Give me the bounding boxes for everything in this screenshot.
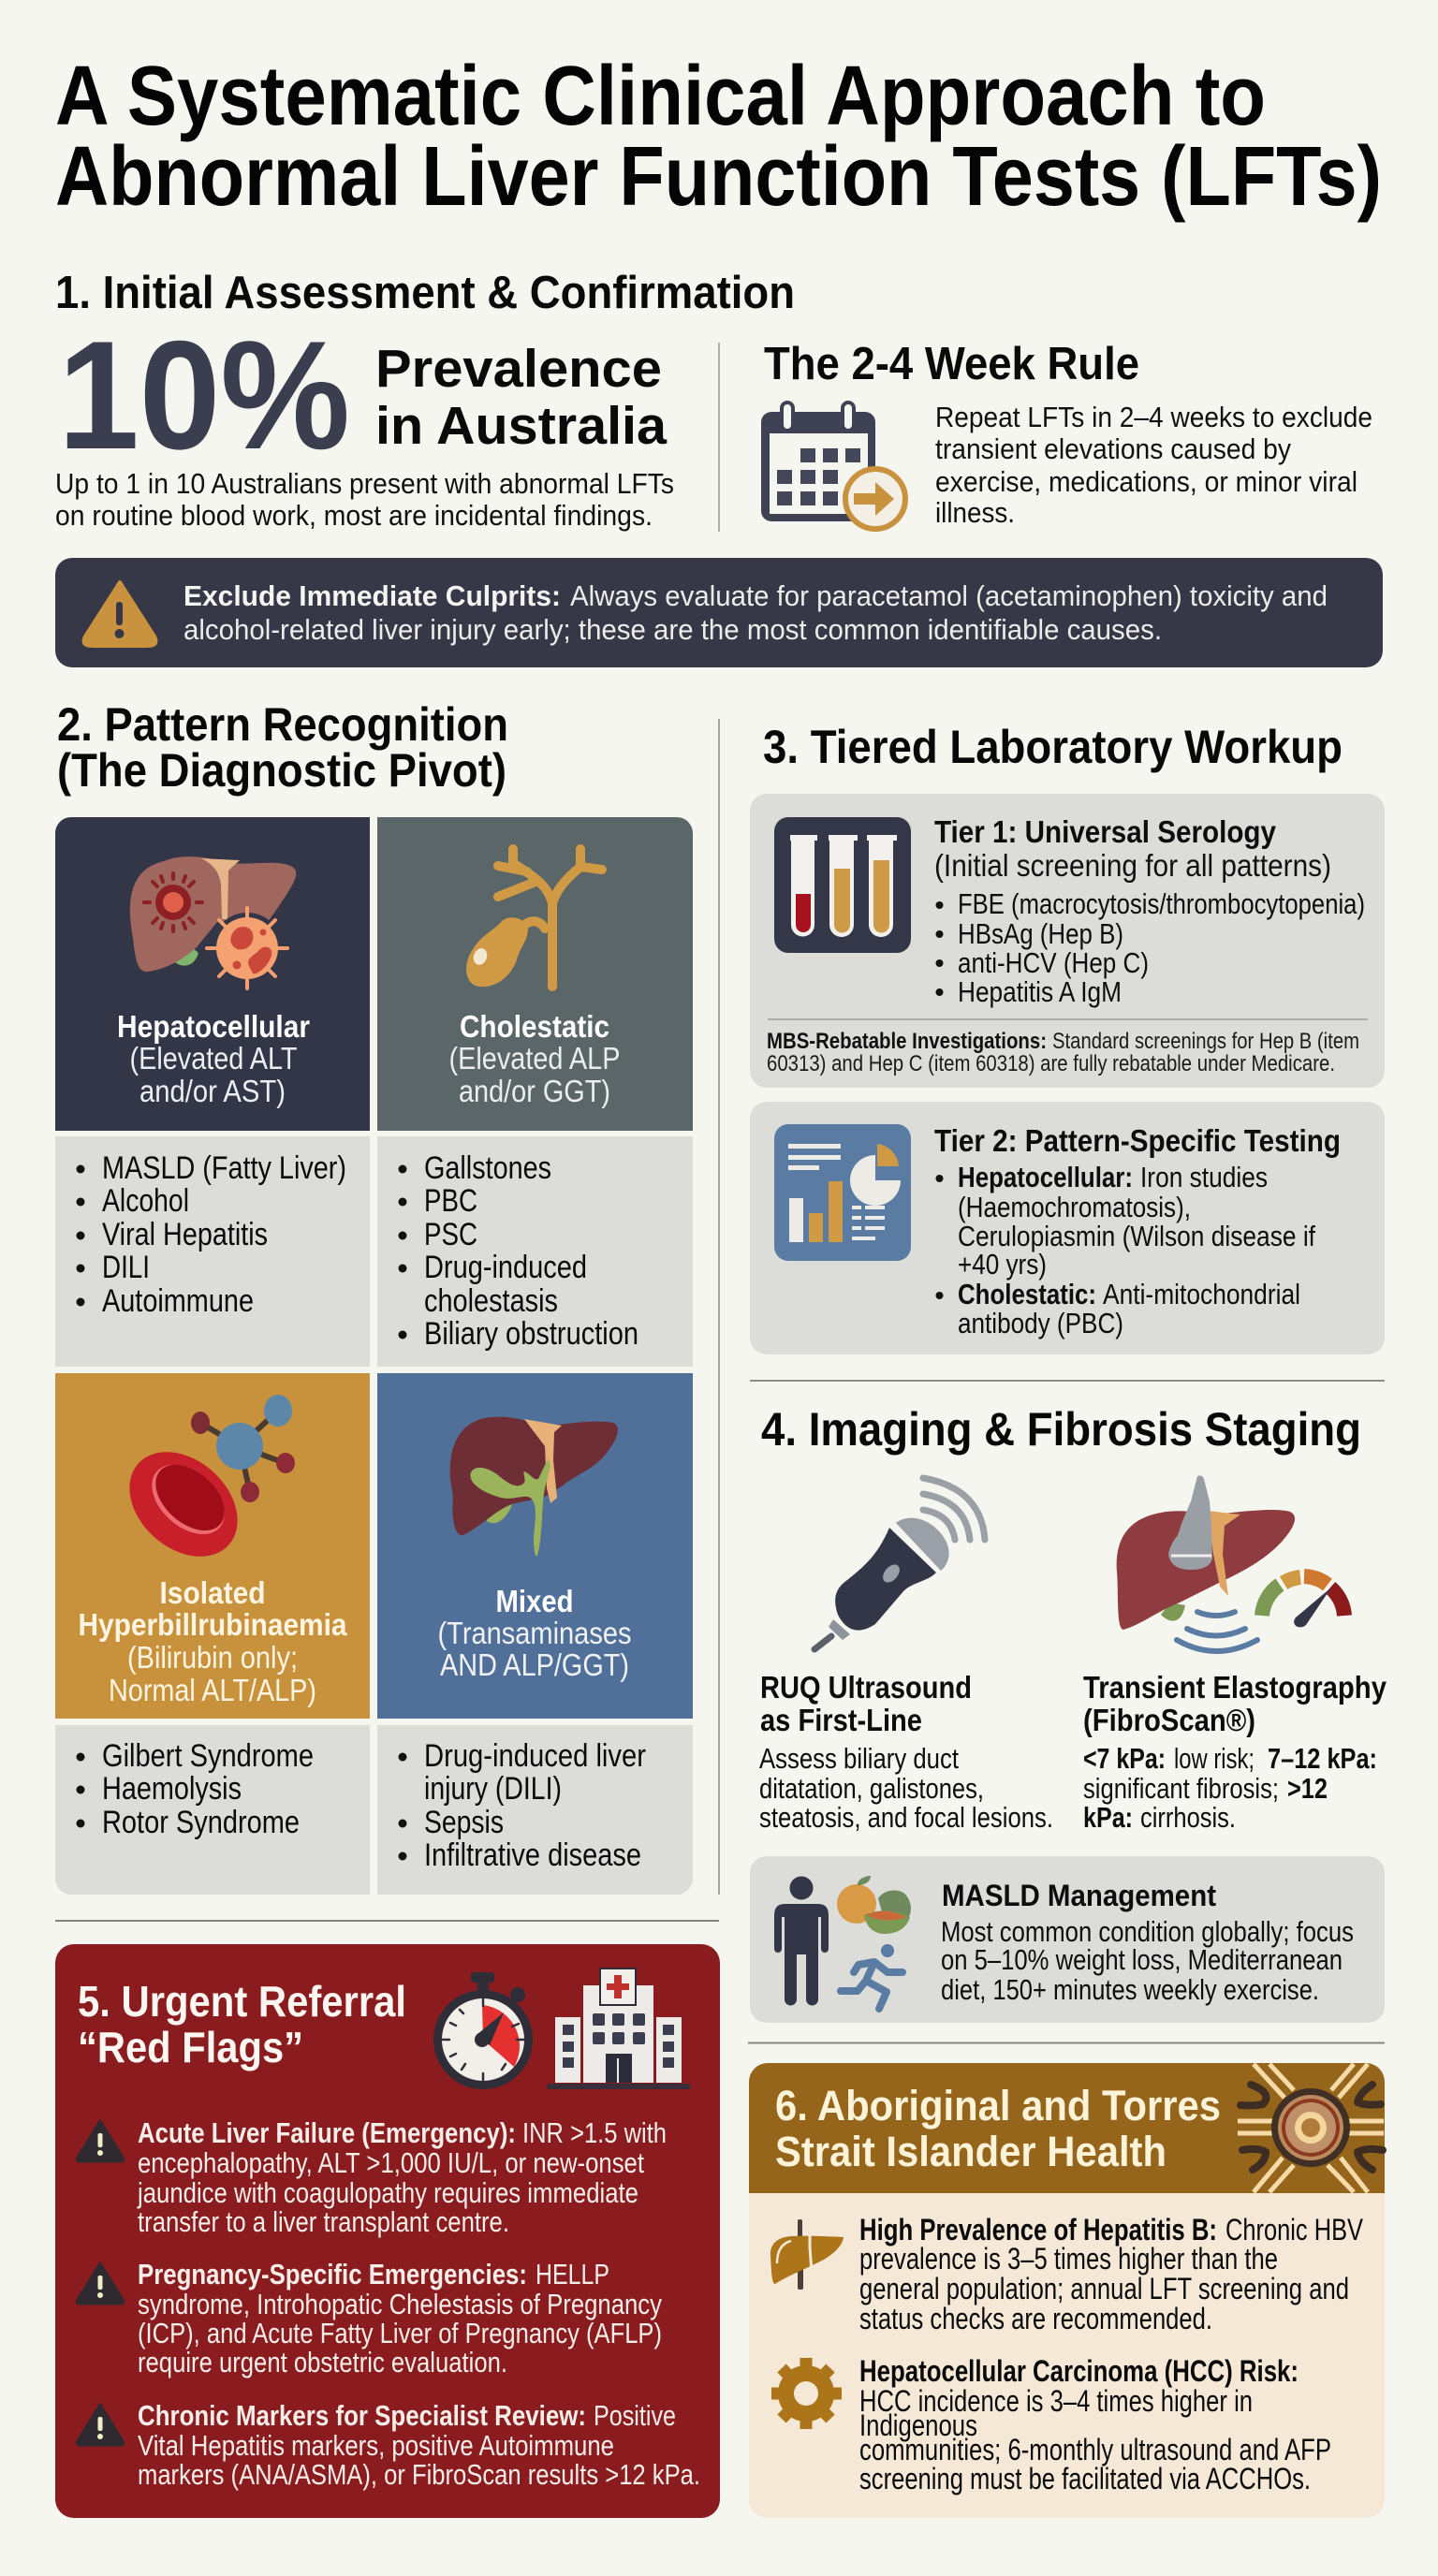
panel: MASLD management: Most common condition globally; focus [941, 1915, 1354, 1948]
panel: mixed header: AND ALP/GGT) [440, 1647, 629, 1682]
icon: gallbladder and bile ducts [466, 849, 602, 987]
heading: section 3: 3. Tiered Laboratory Workup [763, 721, 1343, 773]
heading: section 6: 6. Aboriginal and Torres [775, 2082, 1221, 2130]
panel: cholestatic header: and/or GGT) [459, 1074, 610, 1108]
panel: cholestatic causes: Drug-induced [424, 1250, 587, 1285]
icon: runner [841, 1944, 902, 2009]
text: chronic markers: Positive [594, 2399, 676, 2432]
panel: isolated hyperbilirubinaemia header: (Bilirubin only; [127, 1640, 298, 1675]
panel: hepatocellular header: and/or AST) [139, 1074, 286, 1108]
text: pregnancy-specific emergencies: require urgent obstetric evaluation. [138, 2346, 507, 2378]
text: transient elastography: cirrhosis. [1140, 1801, 1236, 1834]
text: transient elastography: kPa: [1083, 1801, 1133, 1834]
panel: MASLD management: diet, 150+ minutes weekly exercise. [941, 1973, 1319, 2006]
text: 2-4 week rule [935, 401, 1372, 529]
heading: section 5: “Red Flags” [78, 2023, 303, 2071]
text: transient elastography: significant fibrosis; [1083, 1772, 1279, 1805]
panel: isolated hyperbilirubinaemia header: Normal ALT/ALP) [109, 1673, 316, 1707]
text: transient elastography: low risk; [1174, 1742, 1255, 1775]
text: pregnancy-specific emergencies: syndrome, Introhopatic Chelestasis of Pregnancy [138, 2288, 662, 2320]
panel: tier 1: anti-HCV (Hep C) [958, 946, 1149, 979]
panel: tier 2: Cholestatic: [958, 1278, 1096, 1310]
panel: tier 1: FBE (macrocytosis/thrombocytopenia) [958, 887, 1365, 920]
text: RUQ ultrasound: steatosis, and focal lesions. [759, 1801, 1053, 1834]
panel: MASLD management: MASLD Management [942, 1879, 1216, 1912]
icon: liver [770, 2219, 844, 2290]
icon: amber warning triangle [84, 582, 155, 646]
text: pregnancy-specific emergencies: Pregnancy-Specific Emergencies: [138, 2258, 527, 2291]
panel: mixed causes [377, 1725, 693, 1895]
icon: elastography liver with gauge [1117, 1475, 1344, 1651]
panel: cholestatic causes: Biliary obstruction [424, 1316, 638, 1352]
text: 2-4 week rule: transient elevations caused by [935, 432, 1291, 465]
text: pregnancy-specific emergencies: (ICP), and Acute Fatty Liver of Pregnancy (AFLP) [138, 2317, 662, 2349]
panel: hepatocellular header [55, 817, 370, 1131]
icon: red blood cell and molecule [109, 1395, 295, 1577]
panel: MASLD management [750, 1856, 1385, 2023]
text: hepatocellular carcinoma risk [859, 2354, 1331, 2496]
panel: tier 2: (Haemochromatosis), [958, 1191, 1191, 1223]
stat: 10%: 10% [58, 309, 350, 481]
panel: tier 2 [750, 1102, 1385, 1354]
icon: calendar with arrow [761, 402, 905, 529]
text: chronic markers: Chronic Markers for Specialist Review: [138, 2399, 586, 2432]
text: high prevalence of hepatitis B [859, 2213, 1364, 2335]
panel: cholestatic causes: PSC [424, 1217, 477, 1252]
icon: ultrasound probe [814, 1478, 985, 1649]
panel: isolated causes [55, 1725, 370, 1895]
text: transient elastography: 7–12 kPa: [1268, 1742, 1377, 1775]
panel: cholestatic causes [377, 1136, 693, 1367]
title: A Systematic Clinical Approach to [55, 50, 1266, 143]
panel: hepatocellular causes: MASLD (Fatty Liver) [102, 1150, 346, 1186]
icon: liver with biliary tree [450, 1417, 618, 1556]
panel: hepatocellular causes [55, 1136, 370, 1367]
heading: section 6 [775, 2082, 1221, 2175]
panel: cholestatic causes: Gallstones [424, 1150, 551, 1186]
panel: MASLD management: on 5–10% weight loss, Mediterranean [941, 1943, 1343, 1976]
panel: mixed causes: Infiltrative disease [424, 1837, 641, 1873]
stat label: prevalence in Australia: in Australia [375, 396, 668, 456]
panel: tier 2: Hepatocellular: [958, 1161, 1133, 1193]
text: high prevalence of hepatitis B: Chronic HBV [1225, 2213, 1364, 2247]
panel: tier 1: Tier 1: Universal Serology [934, 814, 1277, 849]
panel: hepatocellular header: (Elevated ALT [129, 1041, 298, 1076]
heading: section 2: 2. Pattern Recognition [57, 698, 508, 751]
text: prevalence explanation: Up to 1 in 10 Australians present with abnormal LFTs [55, 467, 674, 500]
panel: isolated causes: Gilbert Syndrome [102, 1738, 314, 1774]
panel: mixed causes: Drug-induced liver [424, 1738, 646, 1774]
icon: healthy food [837, 1876, 911, 1934]
text: pregnancy-specific emergencies [138, 2258, 662, 2378]
panel: tier 1: HBsAg (Hep B) [958, 917, 1123, 950]
heading: section 1: 1. Initial Assessment & Confirmation [55, 268, 795, 318]
panel: tier 1: MBS-Rebatable Investigations: [767, 1029, 1047, 1054]
panel: tier 2: Iron studies [1140, 1161, 1268, 1193]
icon: report with charts [774, 1124, 911, 1261]
text: acute liver failure [137, 2116, 667, 2238]
text: acute liver failure: jaundice with coagulopathy requires immediate [137, 2176, 638, 2209]
callout: exclude immediate culprits: Exclude Immediate Culprits: [183, 579, 561, 612]
text: prevalence explanation: on routine blood work, most are incidental findings. [55, 499, 653, 532]
panel: mixed header [377, 1373, 693, 1719]
panel: isolated hyperbilirubinaemia header [55, 1373, 370, 1719]
text: RUQ ultrasound: ditatation, galistones, [759, 1772, 984, 1805]
text: RUQ ultrasound: RUQ Ultrasound [760, 1670, 972, 1705]
heading: section 5: 5. Urgent Referral [78, 1977, 406, 2026]
icon: warning 3 [77, 2405, 124, 2445]
panel: isolated causes: Haemolysis [102, 1771, 242, 1807]
text: transient elastography: <7 kPa: [1083, 1742, 1166, 1775]
title [55, 50, 1382, 224]
panel: section 5 urgent referral red flags [55, 1944, 720, 2518]
icon: warning 2 [77, 2263, 124, 2304]
panel: hepatocellular causes: Autoimmune [102, 1283, 254, 1319]
panel: hepatocellular causes: DILI [102, 1250, 150, 1285]
panel: tier 1 [750, 794, 1385, 1088]
heading: 2-4 week rule: The 2-4 Week Rule [764, 339, 1139, 389]
icon: stopwatch [433, 1972, 533, 2089]
text: RUQ ultrasound: Assess biliary duct [759, 1742, 959, 1775]
text: chronic markers: Vital Hepatitis markers, positive Autoimmune [138, 2429, 614, 2462]
panel: isolated hyperbilirubinaemia header: Isolated [159, 1575, 266, 1610]
text: hepatocellular carcinoma risk: HCC incidence is 3–4 times higher in [859, 2384, 1253, 2418]
panel: hepatocellular causes: Viral Hepatitis [102, 1217, 268, 1252]
text: hepatocellular carcinoma risk: Hepatocellular Carcinoma (HCC) Risk: [859, 2354, 1299, 2388]
text: transient elastography: Transient Elastography [1083, 1670, 1387, 1705]
panel: tier 2: antibody (PBC) [958, 1307, 1123, 1339]
stat label: prevalence in Australia: Prevalence [375, 339, 662, 399]
text: 2-4 week rule: exercise, medications, or minor viral [935, 465, 1357, 498]
heading: section 5 [78, 1977, 406, 2071]
text: transient elastography [1083, 1670, 1387, 1834]
panel: isolated hyperbilirubinaemia header: Hyperbillrubinaemia [79, 1607, 347, 1642]
text: RUQ ultrasound [759, 1670, 1053, 1834]
heading: section 2: (The Diagnostic Pivot) [57, 744, 506, 797]
text: hepatocellular carcinoma risk: Indigenous [859, 2408, 977, 2442]
panel: tier 1: Standard screenings for Hep B (item [1052, 1029, 1359, 1054]
icon: blood test tubes [774, 817, 911, 953]
text: prevalence explanation [55, 467, 674, 532]
callout: exclude immediate culprits [55, 558, 1383, 667]
panel: cholestatic causes: PBC [424, 1183, 477, 1219]
panel: mixed header: (Transaminases [438, 1616, 631, 1650]
panel: tier 1: Hepatitis A IgM [958, 975, 1122, 1008]
text: acute liver failure: transfer to a liver transplant centre. [138, 2205, 509, 2238]
text: hepatocellular carcinoma risk: communities; 6-monthly ultrasound and AFP [859, 2433, 1331, 2466]
text: 2-4 week rule: illness. [935, 496, 1015, 529]
panel: isolated causes: Rotor Syndrome [102, 1805, 300, 1840]
callout: exclude immediate culprits: Always evaluate for paracetamol (acetaminophen) toxicity and [570, 579, 1328, 612]
icon: warning 1 [77, 2121, 124, 2161]
heading: section 4: 4. Imaging & Fibrosis Staging [761, 1403, 1361, 1456]
text: high prevalence of hepatitis B: status checks are recommended. [859, 2302, 1212, 2335]
text: 2-4 week rule: Repeat LFTs in 2–4 weeks to exclude [935, 401, 1372, 433]
text: chronic markers: markers (ANA/ASMA), or FibroScan results >12 kPa. [138, 2458, 700, 2491]
text: acute liver failure: encephalopathy, ALT >1,000 IU/L, or new-onset [138, 2146, 644, 2179]
text: RUQ ultrasound: as First-Line [760, 1703, 922, 1737]
icon: person [774, 1876, 829, 2005]
panel: tier 2: +40 yrs) [958, 1248, 1047, 1281]
panel: tier 1: 60313) and Hep C (item 60318) are fully rebatable under Medicare. [767, 1051, 1335, 1076]
panel: hepatocellular header: Hepatocellular [117, 1009, 310, 1044]
text: acute liver failure: INR >1.5 with [522, 2116, 667, 2149]
text: transient elastography: (FibroScan®) [1083, 1703, 1255, 1737]
heading: section 2 [57, 698, 508, 797]
callout: exclude immediate culprits: alcohol-related liver injury early; these are the most common identifiable causes. [183, 613, 1162, 646]
icon: hospital [547, 1968, 691, 2089]
panel: section 6 Aboriginal and Torres Strait Islander health [749, 2063, 1385, 2518]
panel: hepatocellular causes: Alcohol [102, 1183, 189, 1219]
panel: cholestatic header [377, 817, 693, 1131]
heading: section 6: Strait Islander Health [775, 2128, 1167, 2175]
panel: tier 2: Anti-mitochondrial [1103, 1278, 1300, 1310]
text: high prevalence of hepatitis B: High Prevalence of Hepatitis B: [859, 2213, 1217, 2247]
text: acute liver failure: Acute Liver Failure (Emergency): [138, 2116, 516, 2149]
text: pregnancy-specific emergencies: HELLP [536, 2258, 609, 2291]
panel: cholestatic header: Cholestatic [460, 1009, 609, 1044]
icon: inflamed liver with virus [130, 856, 296, 988]
panel: mixed causes: injury (DILI) [424, 1771, 562, 1807]
panel: cholestatic header: (Elevated ALP [449, 1041, 620, 1076]
panel: cholestatic causes: cholestasis [424, 1283, 558, 1319]
text: hepatocellular carcinoma risk: screening must be facilitated via ACCHOs. [859, 2462, 1311, 2496]
text: transient elastography: >12 [1287, 1772, 1328, 1805]
panel: mixed causes: Sepsis [424, 1805, 504, 1840]
panel: tier 2: Cerulopiasmin (Wilson disease if [958, 1220, 1315, 1252]
icon: dot painting motif [1238, 2064, 1384, 2192]
panel: mixed header: Mixed [496, 1584, 573, 1618]
panel: tier 2: Tier 2: Pattern-Specific Testing [934, 1123, 1341, 1158]
panel: tier 1: (Initial screening for all patterns) [934, 848, 1331, 883]
text: high prevalence of hepatitis B: prevalence is 3–5 times higher than the [859, 2242, 1278, 2276]
text: chronic markers [138, 2399, 700, 2491]
icon: gear [771, 2358, 842, 2429]
stat label: prevalence in Australia [375, 339, 668, 456]
